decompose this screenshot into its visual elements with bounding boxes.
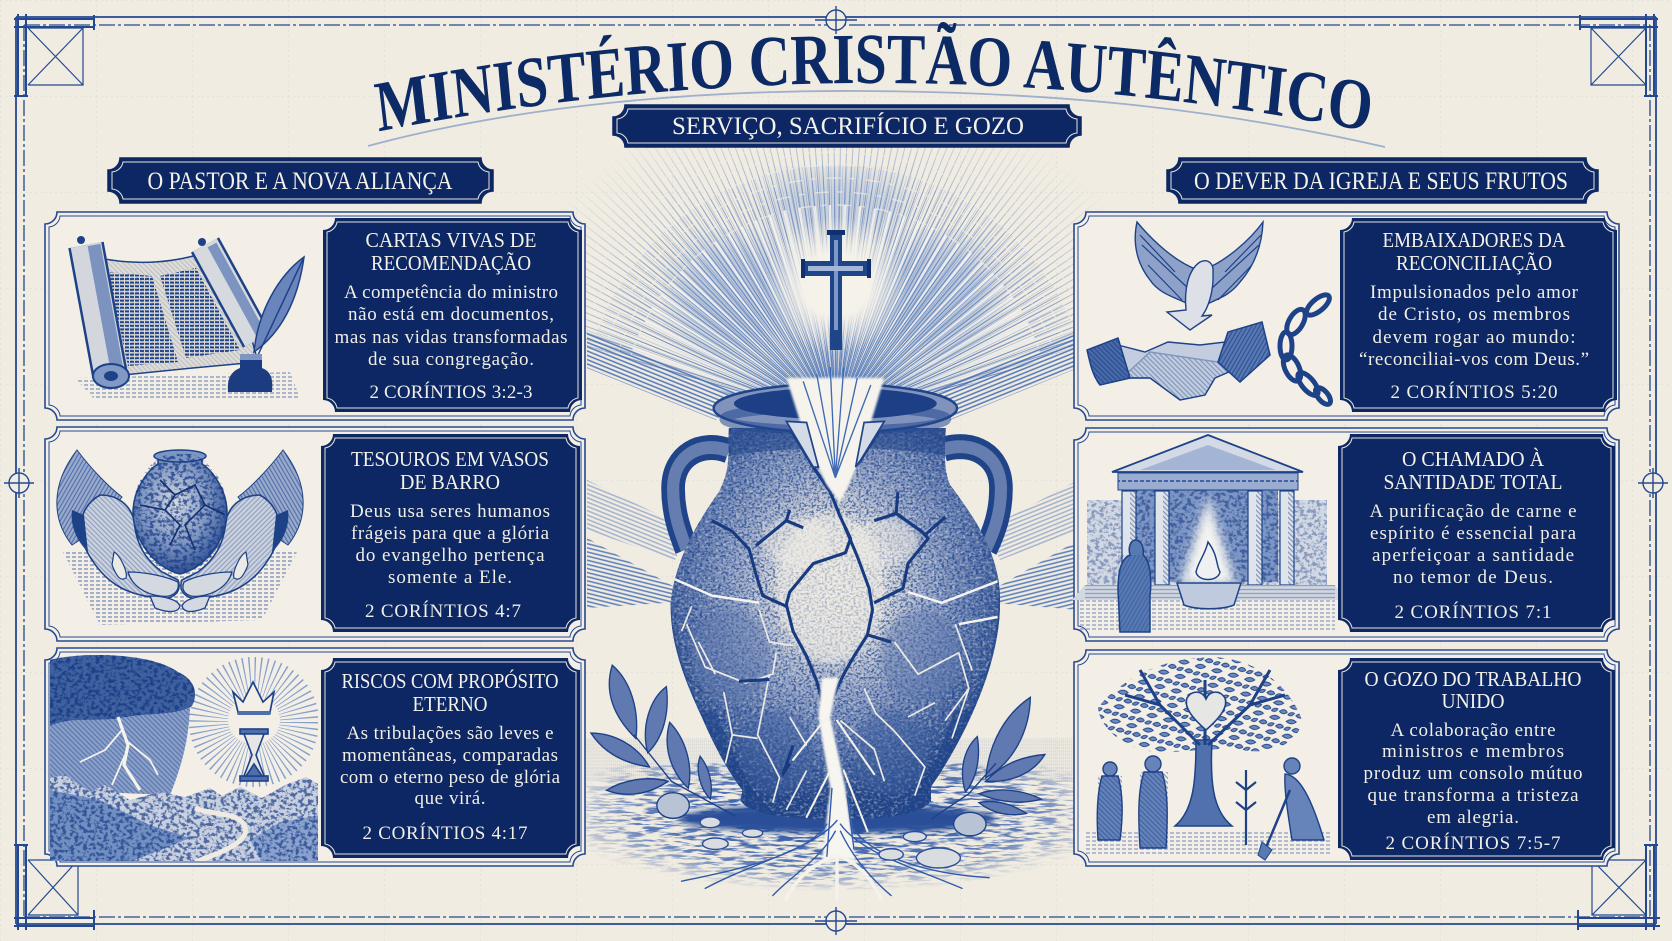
text box: ministros e membros xyxy=(1382,741,1564,762)
text box: SANTIDADE TOTAL xyxy=(1384,470,1562,494)
ground xyxy=(586,738,1074,890)
text box: 2 CORÍNTIOS 3:2-3 xyxy=(370,381,532,403)
panel: o gozo do trabalho unido xyxy=(1074,650,1619,866)
text box: somente a Ele. xyxy=(388,567,512,588)
subtitle banner: SERVIÇO, SACRIFÍCIO E GOZO xyxy=(672,112,1024,140)
olive sprig left xyxy=(591,665,736,818)
panel: embaixadores da reconciliação xyxy=(1074,212,1619,420)
icon: cross xyxy=(801,230,871,350)
text box: RECOMENDAÇÃO xyxy=(371,251,531,275)
dark cracks xyxy=(712,422,945,774)
panel: riscos com propósito eterno xyxy=(45,648,585,866)
jar handles xyxy=(673,447,1001,549)
text box: A colaboração entre xyxy=(1390,720,1556,741)
panel: tesouros em vasos de barro xyxy=(45,427,585,641)
text box: EMBAIXADORES DA xyxy=(1382,228,1566,252)
text box: “reconciliai-vos com Deus.” xyxy=(1359,349,1589,370)
text box: O CHAMADO À xyxy=(1402,447,1545,471)
title arc xyxy=(368,91,1385,147)
text box xyxy=(1340,218,1617,412)
text box: momentâneas, comparadas xyxy=(342,745,558,766)
panel: cartas vivas de recomendação xyxy=(45,212,585,420)
corner top-right xyxy=(1580,14,1658,96)
olive sprig right xyxy=(932,697,1045,836)
text box: RISCOS COM PROPÓSITO xyxy=(342,669,558,693)
icon: open scroll, quill and inkwell xyxy=(75,236,304,400)
left column heading xyxy=(108,158,493,203)
pale cracks xyxy=(682,606,972,810)
text box: 2 CORÍNTIOS 5:20 xyxy=(1390,381,1558,403)
corner bottom-left xyxy=(14,845,94,930)
text box: ETERNO xyxy=(412,692,488,716)
icon: tree with heart, figures and sapling xyxy=(1085,655,1330,860)
jar body xyxy=(665,422,1006,824)
text box xyxy=(321,658,580,858)
panel: o chamado à santidade total xyxy=(1072,428,1619,641)
text box: DE BARRO xyxy=(400,470,500,494)
text box: 2 CORÍNTIOS 4:7 xyxy=(365,600,521,622)
text box xyxy=(321,434,580,632)
text box: em alegria. xyxy=(1427,807,1519,828)
jar rim xyxy=(714,384,957,432)
text box: frágeis para que a glória xyxy=(351,523,550,544)
left column heading: O PASTOR E A NOVA ALIANÇA xyxy=(148,168,452,195)
icon: dove, handshake and broken chain xyxy=(1087,222,1333,407)
text box: do evangelho pertença xyxy=(356,545,545,566)
text box: que transforma a tristeza xyxy=(1368,785,1579,806)
text box: de sua congregação. xyxy=(368,349,534,370)
text box: O GOZO DO TRABALHO xyxy=(1364,667,1582,691)
text box: de Cristo, os membros xyxy=(1378,304,1570,325)
pebbles xyxy=(700,817,960,868)
text box: que virá. xyxy=(414,788,486,809)
text box: no temor de Deus. xyxy=(1393,567,1553,588)
text box: aperfeiçoar a santidade xyxy=(1372,545,1574,566)
glowing belt crack xyxy=(671,578,998,624)
light beams to right panels xyxy=(925,330,1078,618)
text box: espírito é essencial para xyxy=(1370,523,1577,544)
rays from the jar xyxy=(540,124,1132,716)
text box: TESOUROS EM VASOS xyxy=(351,447,549,471)
text box: não está em documentos, xyxy=(348,304,554,325)
subtitle banner xyxy=(613,105,1081,147)
light beams to left panels xyxy=(587,330,745,618)
text box: com o eterno peso de glória xyxy=(340,767,561,788)
title: MINISTÉRIO CRISTÃO AUTÊNTICO xyxy=(374,22,1370,132)
icon: temple, flame and robed figure xyxy=(1072,435,1345,632)
text box: Impulsionados pelo amor xyxy=(1370,282,1579,303)
text box xyxy=(323,218,582,412)
icon: hands holding cracked jar xyxy=(57,450,303,625)
text box: mas nas vidas transformadas xyxy=(334,327,568,348)
text box: A purificação de carne e xyxy=(1370,501,1576,522)
text box: As tribulações são leves e xyxy=(346,723,554,744)
text box: RECONCILIAÇÃO xyxy=(1396,251,1552,275)
text box: 2 CORÍNTIOS 7:1 xyxy=(1394,601,1552,623)
text box xyxy=(1338,658,1615,860)
text box: produz um consolo mútuo xyxy=(1364,763,1582,784)
text box: devem rogar ao mundo: xyxy=(1372,327,1576,348)
roots of light xyxy=(682,717,989,899)
text box: Deus usa seres humanos xyxy=(350,501,550,522)
central cracked clay jar illustration xyxy=(577,367,1094,906)
text box: 2 CORÍNTIOS 4:17 xyxy=(362,822,528,844)
right column heading xyxy=(1167,158,1598,203)
text box xyxy=(1338,434,1615,632)
text box: A competência do ministro xyxy=(344,282,558,303)
escaping light xyxy=(786,367,884,860)
icon: storm, crown and hourglass xyxy=(50,650,320,862)
right column heading: O DEVER DA IGREJA E SEUS FRUTOS xyxy=(1194,168,1568,195)
text box: 2 CORÍNTIOS 7:5-7 xyxy=(1386,832,1560,854)
corner top-left xyxy=(14,14,94,96)
text box: CARTAS VIVAS DE xyxy=(366,228,536,252)
corner bottom-right xyxy=(1578,845,1660,930)
text box: UNIDO xyxy=(1442,689,1504,713)
